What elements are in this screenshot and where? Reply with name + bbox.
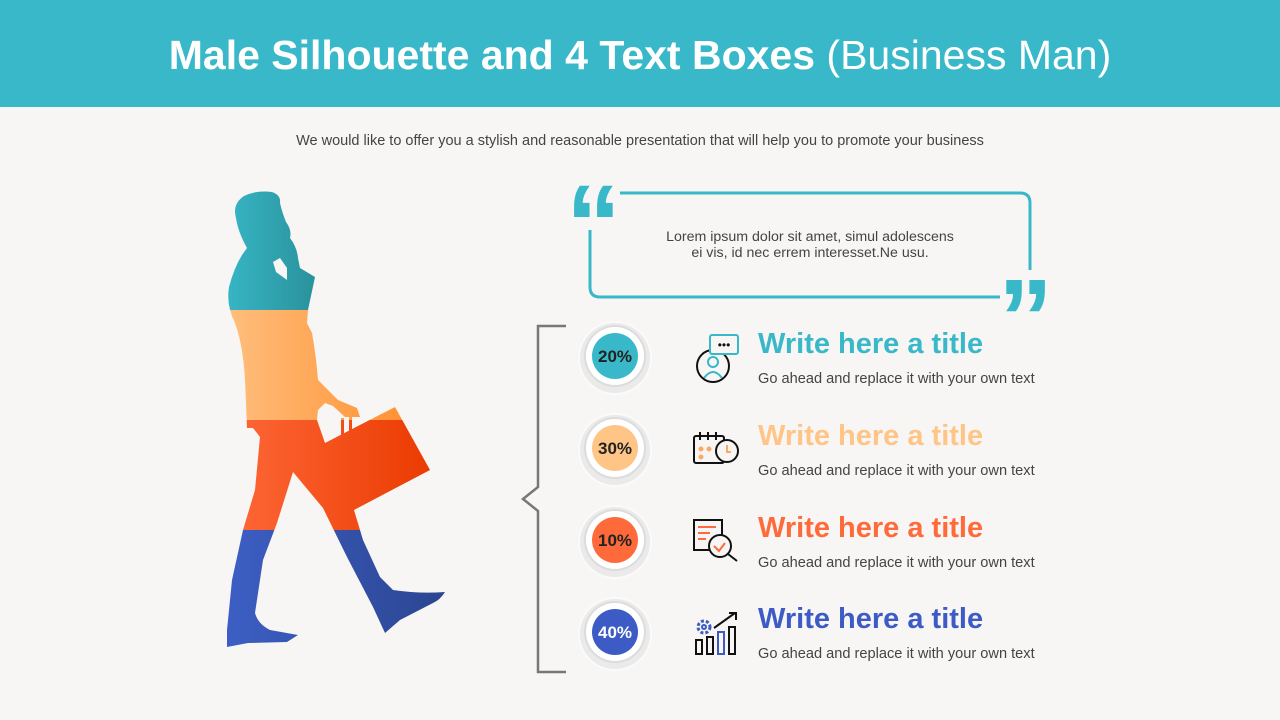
item 4 [758,603,1035,662]
quote box [566,163,1053,380]
circles: 30% [598,439,632,458]
text: Write here a title [758,328,983,360]
circles: 10% [598,531,632,550]
quote box: Lorem ipsum dolor sit amet, simul adolescens [666,229,954,245]
circles: 40% [598,623,632,642]
item 2 [758,420,1035,479]
icon: growth chart [696,613,736,654]
icon: calendar watch [694,432,738,463]
title: Male Silhouette and 4 Text Boxes (Business Man) [169,32,1111,78]
item 1 [758,328,1035,387]
text: Write here a title [758,603,983,635]
silhouette [220,185,450,650]
subtitle: We would like to offer you a stylish and reasonable presentation that will help you to promote your business [296,133,984,149]
text: Go ahead and replace it with your own text [758,463,1035,479]
text: Go ahead and replace it with your own text [758,371,1035,387]
item 3 [758,512,1035,571]
quote box: ei vis, id nec errem interesset.Ne usu. [691,245,929,261]
main graphic [227,186,1045,674]
bracket [523,326,566,672]
icon: person chat [697,335,738,382]
text: Write here a title [758,512,983,544]
icon: document search [694,520,737,561]
icon: person chat: ••• [718,338,730,352]
circles: 20% [598,347,632,366]
text: Go ahead and replace it with your own text [758,555,1035,571]
circles [579,322,651,670]
quote box: ” [998,257,1053,380]
quote box: “ [566,163,621,286]
text: Go ahead and replace it with your own text [758,646,1035,662]
title [0,0,1280,107]
text: Write here a title [758,420,983,452]
